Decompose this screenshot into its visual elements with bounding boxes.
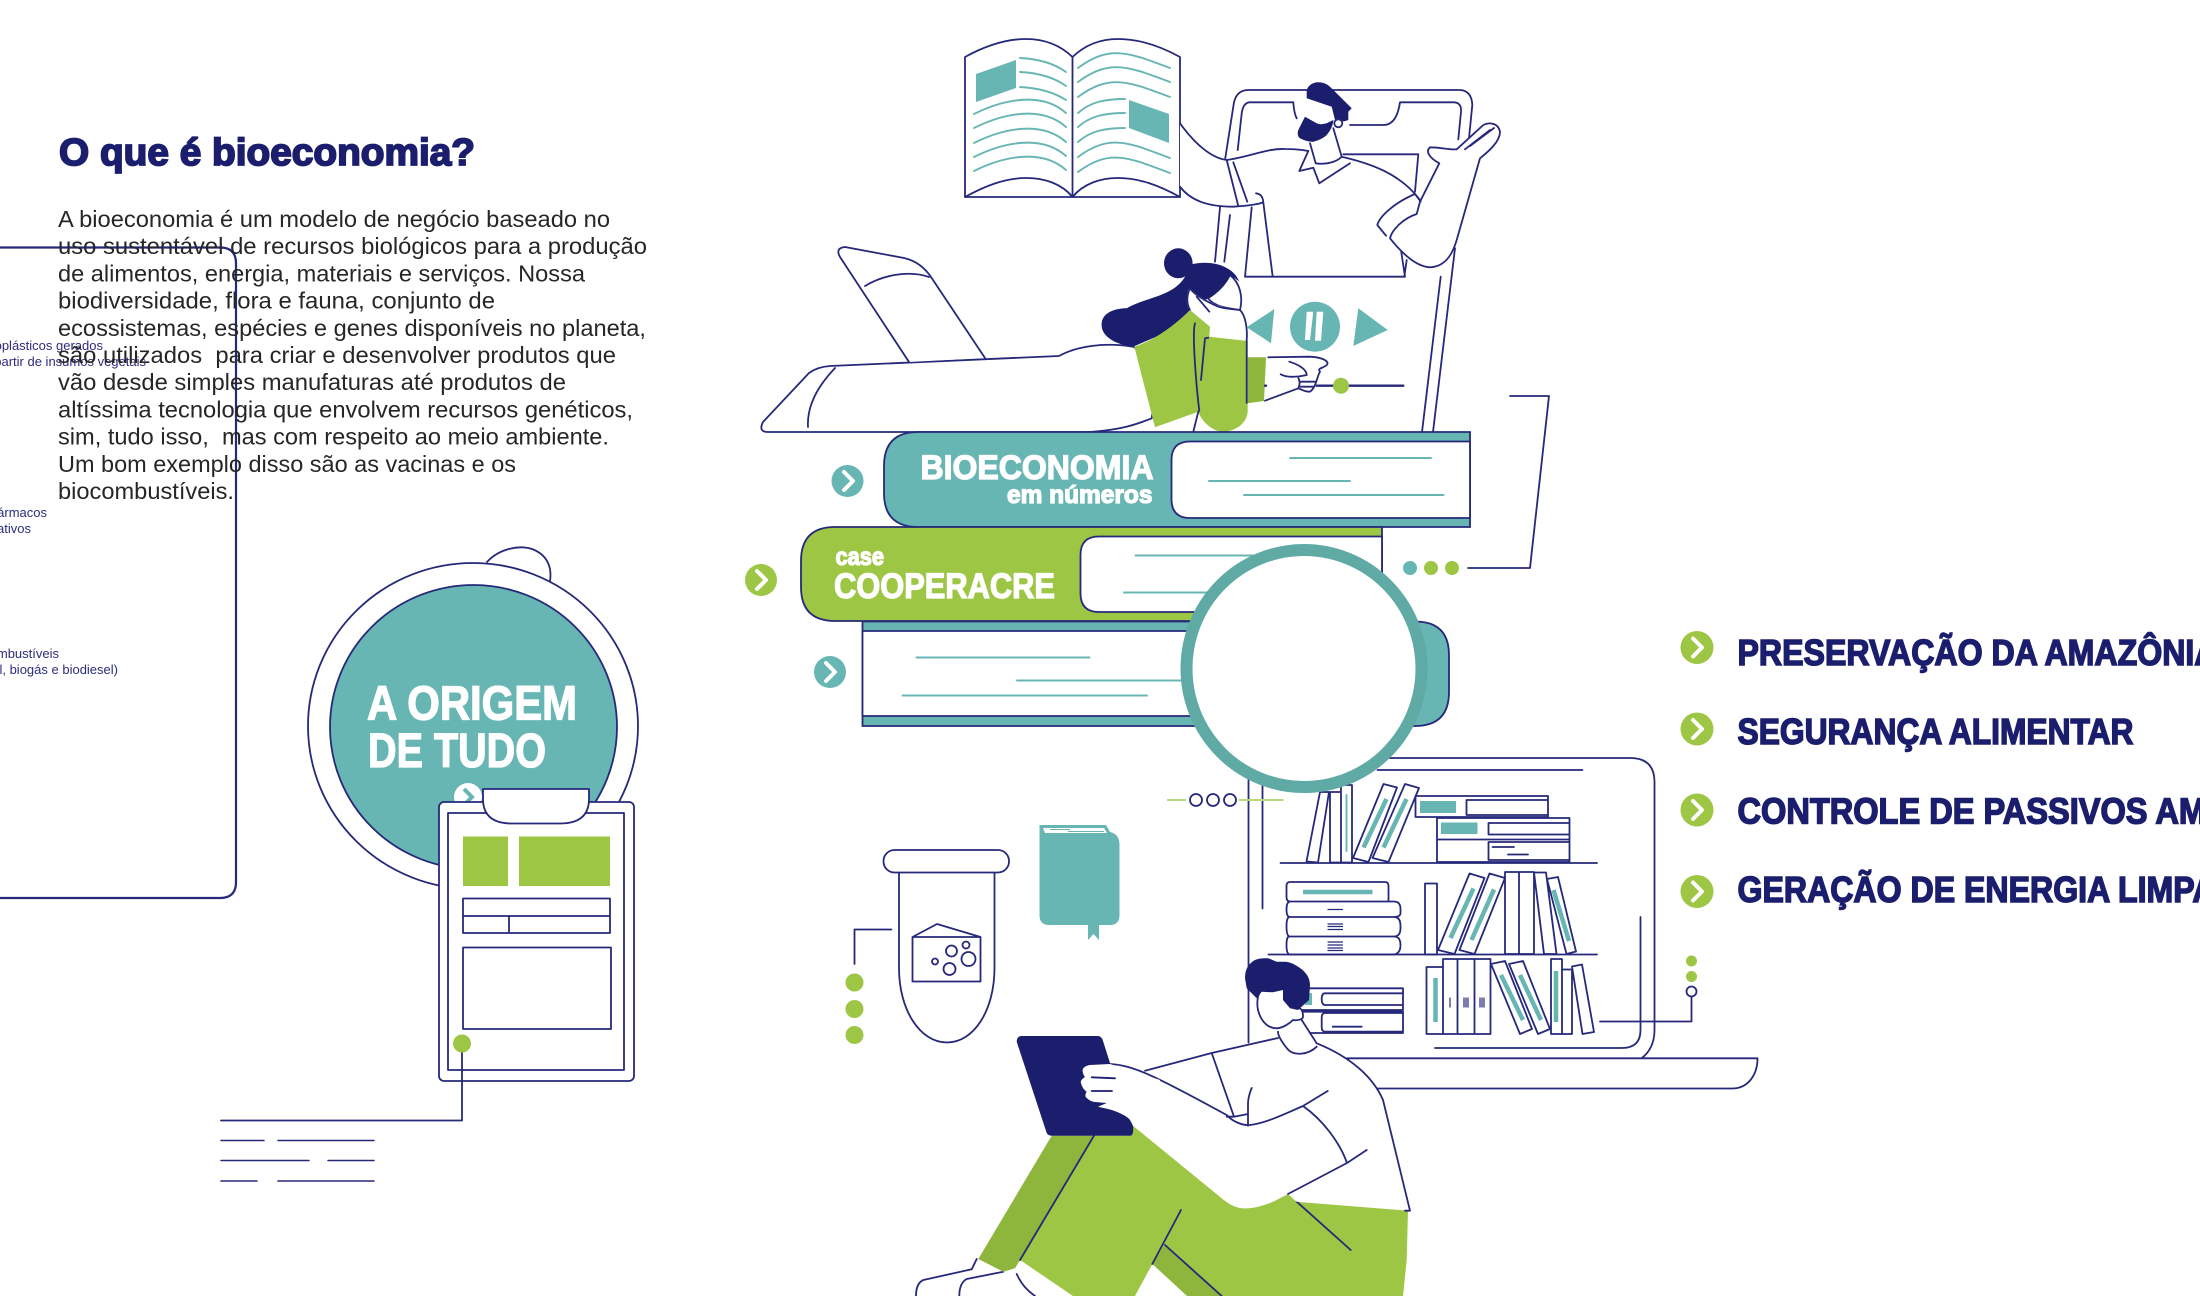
trousers main <box>1020 1126 1408 1296</box>
icon: teal chevron button <box>832 465 864 497</box>
book title: COOPERACRE: COOPERACRE <box>834 567 1055 606</box>
text block: definition paragraph: altíssima tecnologia que envolvem recursos genéticos, <box>58 396 633 422</box>
man: neck <box>1310 120 1342 164</box>
illustration: man reading tablet <box>916 958 1410 1296</box>
book: unlabelled pages <box>862 622 1449 726</box>
icon: open book <box>965 39 1180 197</box>
woman: green blouse <box>1134 310 1248 432</box>
neck <box>1278 1020 1317 1054</box>
text block: definition paragraph: uso sustentável de recursos biológicos para a produção <box>58 233 647 259</box>
text block: definition paragraph: biocombustíveis. <box>58 478 234 504</box>
heading: DE TUDO: DE TUDO <box>368 725 546 778</box>
man: face <box>1305 98 1334 125</box>
leader with green dots <box>846 930 892 1044</box>
leader line with three dots <box>1403 396 1549 575</box>
shelf 1 stacked books <box>1416 796 1570 862</box>
book: case COOPERACRE <box>801 527 1382 621</box>
man: beard <box>1298 117 1333 142</box>
man: arm holding book <box>1180 123 1238 207</box>
control: previous button <box>1247 309 1274 343</box>
trousers dark side <box>978 1136 1094 1272</box>
text block: definition paragraph: ecossistemas, espécies e genes disponíveis no planeta, <box>58 315 646 341</box>
woman: raised feet <box>838 247 985 362</box>
control: progress slider <box>1265 378 1403 394</box>
man: raised arm and hand <box>1390 123 1500 267</box>
control: next button <box>1353 308 1388 346</box>
man: torso <box>1227 149 1420 277</box>
text block: definition paragraph: A bioeconomia é um modelo de negócio baseado no <box>58 206 610 232</box>
icon: teal chevron button lower <box>814 656 846 688</box>
book title: BIOECONOMIA: BIOECONOMIA <box>920 449 1154 487</box>
item: segurança alimentar: SEGURANÇA ALIMENTAR <box>1738 711 2134 752</box>
illustration: woman lying down at controls <box>761 240 1328 432</box>
text block: definition paragraph: Um bom exemplo disso são as vacinas e os <box>58 451 516 477</box>
shoes <box>916 1259 1073 1296</box>
man: back panel <box>1343 154 1418 192</box>
trousers dark wedge <box>1152 1245 1222 1296</box>
forearm outline <box>1110 1064 1367 1194</box>
book: BIOECONOMIA em números <box>884 432 1470 527</box>
icon: magnifying lens <box>1186 550 1422 787</box>
man: collar <box>1299 151 1350 183</box>
icon: chevron button <box>454 783 482 811</box>
woman: face <box>1208 275 1241 310</box>
shelf 3 stacked books behind head <box>1300 988 1403 1033</box>
text block: definition paragraph: vão desde simples manufaturas até produtos de <box>58 369 566 395</box>
hand <box>1081 1064 1160 1126</box>
icon: teal closed book <box>1040 825 1120 940</box>
control: pause button <box>1290 302 1340 352</box>
woman: hair <box>1102 263 1239 347</box>
text block: definition paragraph <box>58 206 647 504</box>
shirt <box>1133 1038 1410 1211</box>
head <box>1257 985 1303 1028</box>
tablet device <box>1017 1036 1133 1136</box>
panel: clipped rounded frame with biomaterial labels <box>0 248 236 898</box>
woman: hand on cheek <box>1187 288 1247 342</box>
book subtitle: em números: em números <box>1007 481 1152 509</box>
shelf 2 stacked books <box>1286 882 1400 954</box>
book label: case: case <box>836 543 884 571</box>
shelf 1 vertical books <box>1306 784 1419 862</box>
shelf 3 books <box>1426 959 1594 1034</box>
icon: pagination dots <box>1167 794 1284 806</box>
text block: definition paragraph: são utilizados para criar e desenvolver produtos que <box>58 342 616 368</box>
text block: definition paragraph: de alimentos, energia, materiais e serviços. Nossa <box>58 260 586 286</box>
illustration: man with beard presenting <box>1180 82 1500 277</box>
text block: definition paragraph: sim, tudo isso, mas com respeito ao meio ambiente. <box>58 424 609 450</box>
title: O que é bioeconomia? <box>59 132 475 174</box>
leader line with dots <box>1600 956 1697 1022</box>
icon: clipboard <box>221 789 634 1181</box>
icon: green chevron button <box>745 564 777 596</box>
icon: stopwatch with A ORIGEM DE TUDO <box>308 547 638 889</box>
woman: bun <box>1164 248 1193 278</box>
heading: A ORIGEM: A ORIGEM <box>367 678 577 730</box>
shelf 2 vertical books <box>1425 872 1576 954</box>
list: benefits <box>1680 631 2200 910</box>
man: hair <box>1307 82 1352 122</box>
illustration: tablet screen frame <box>1225 90 1472 432</box>
woman: body and legs <box>761 345 1160 432</box>
icon: test tube with cheese <box>846 850 1009 1044</box>
woman: pointing hand <box>1265 357 1328 401</box>
illustration: laptop with bookshelf <box>1248 758 1758 1088</box>
hair <box>1245 958 1310 1010</box>
text block: definition paragraph: biodiversidade, flora e fauna, conjunto de <box>58 288 495 314</box>
